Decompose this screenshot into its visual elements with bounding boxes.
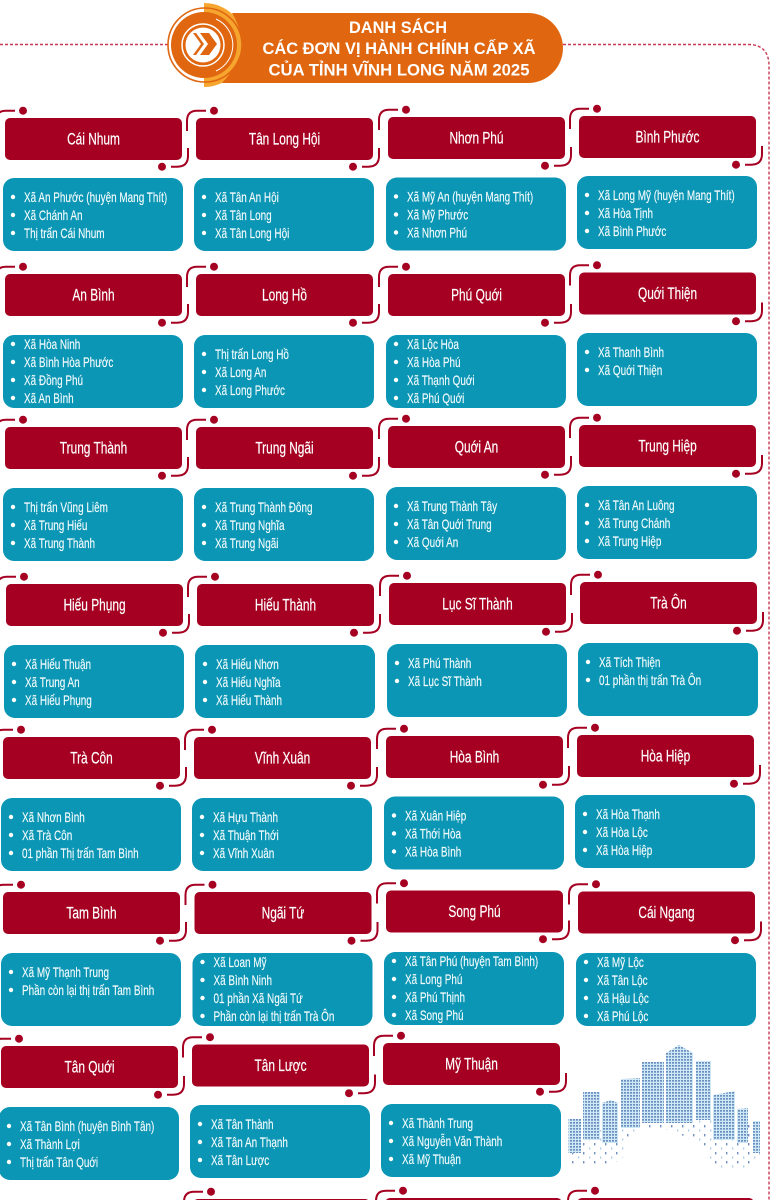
header: Cái Nhum [0, 107, 188, 171]
list: Trà Côn: Xã Trà Côn [22, 827, 72, 843]
header: Tân Lược [183, 1033, 375, 1097]
header: Hiếu Thành: Hiếu Thành [255, 597, 316, 615]
list: Tân Lược: Xã Tân An Thạnh [211, 1134, 288, 1150]
list: Vĩnh Xuân: Xã Thuận Thới [213, 827, 279, 843]
list: Tân Long Hội: Xã Tân Long Hội [215, 225, 289, 241]
panel: Cái Nhum [0, 107, 188, 251]
header: An Bình [0, 263, 188, 327]
panel: Quới Thiện [570, 261, 762, 406]
panel: Mỹ Thuận [374, 1032, 566, 1177]
list: Trà Ôn: Xã Tích Thiện [599, 654, 660, 670]
header: Bình Phước [570, 105, 762, 169]
list: Cái Ngang: Xã Tân Lộc [597, 972, 648, 988]
list: Trà Côn [1, 798, 181, 871]
list: Trung Hiệp [577, 486, 757, 559]
header stub: column 4 [568, 1187, 760, 1200]
list: An Bình: Xã Bình Hòa Phước [24, 354, 113, 370]
header: Nhơn Phú: Nhơn Phú [449, 130, 504, 148]
list: Tam Bình: Xã Mỹ Thạnh Trung [22, 964, 109, 980]
list: Hiếu Thành: Xã Hiếu Thành [216, 692, 282, 708]
header: Quới An [379, 415, 571, 479]
list: Song Phú: Xã Song Phú [405, 1007, 464, 1023]
panel: Ngãi Tứ [186, 881, 378, 1026]
header: Vĩnh Xuân [185, 726, 377, 790]
list: Quới An: Xã Tân Quới Trung [407, 516, 492, 532]
list: Trung Ngãi: Xã Trung Thành Đông [215, 499, 313, 515]
title text: DANH SÁCH [349, 18, 447, 37]
header: Trung Ngãi [187, 416, 379, 480]
list: Song Phú: Xã Phú Thịnh [405, 989, 465, 1005]
list: Cái Ngang: Xã Mỹ Lộc [597, 954, 644, 970]
header: Ngãi Tứ: Ngãi Tứ [262, 905, 305, 923]
list: Hiếu Thành [195, 645, 375, 718]
list: Trà Côn: Xã Nhơn Bình [22, 809, 85, 825]
header: Quới Thiện [570, 261, 762, 325]
title text [262, 18, 536, 80]
list: Cái Nhum: Xã Chánh An [24, 207, 83, 223]
list: An Bình: Xã Hòa Ninh [24, 336, 80, 352]
row 8 partial headers [184, 1187, 760, 1200]
list: Trung Hiệp: Xã Trung Hiệp [598, 533, 662, 549]
list: Bình Phước [577, 176, 757, 249]
list: Phú Quới: Xã Hòa Phú [407, 354, 461, 370]
list: Cái Nhum: Thị trấn Cái Nhum [24, 225, 105, 241]
list: Hòa Hiệp [575, 795, 755, 868]
header: Ngãi Tứ [186, 881, 378, 945]
panel: Tân Long Hội [187, 107, 379, 251]
list: Tân Lược: Xã Tân Thành [211, 1116, 274, 1132]
list: Long Hồ: Xã Long An [215, 364, 266, 380]
list: Quới An: Xã Quới An [407, 534, 458, 550]
panel: Hiếu Thành [188, 573, 380, 718]
panel: Quới An [379, 415, 571, 560]
panel: Vĩnh Xuân [185, 726, 377, 871]
header: Hiếu Phụng [0, 573, 189, 637]
list: Tân Quới: Xã Tân Bình (huyện Bình Tân) [20, 1118, 154, 1134]
list: Quới An [386, 487, 566, 560]
list: Mỹ Thuận: Xã Mỹ Thuận [402, 1151, 461, 1167]
header: Quới An: Quới An [455, 439, 498, 457]
header: Trà Ôn: Trà Ôn [650, 593, 687, 613]
header: Trà Côn [0, 726, 186, 790]
header: Trung Hiệp [570, 414, 762, 478]
list: Tân Quới: Xã Thành Lợi [20, 1136, 80, 1152]
header: Song Phú: Song Phú [448, 903, 501, 922]
panel: Long Hồ [187, 263, 379, 408]
list: Cái Nhum [3, 178, 183, 251]
header: Hiếu Phụng: Hiếu Phụng [63, 597, 126, 615]
list: Tân Long Hội [194, 178, 374, 251]
list: Hòa Hiệp: Xã Hòa Thạnh [596, 806, 660, 822]
title pill [222, 13, 563, 83]
list: Tân Quới [0, 1107, 179, 1180]
list: Trung Thành: Xã Trung Hiếu [24, 517, 87, 533]
panel: Tân Quới [0, 1035, 184, 1180]
header: Phú Quới: Phú Quới [451, 287, 502, 305]
list: Hiếu Thành: Xã Hiếu Nghĩa [216, 674, 281, 690]
panel: Trung Thành [0, 416, 188, 561]
header: Trung Hiệp: Trung Hiệp [638, 438, 697, 456]
list: Tân Lược [190, 1105, 370, 1178]
list: Cái Ngang: Xã Phú Lộc [597, 1008, 648, 1024]
list: Bình Phước: Xã Bình Phước [598, 223, 666, 239]
panel: Tân Lược [183, 1033, 375, 1178]
header stub: column 2 [184, 1188, 376, 1200]
list: Nhơn Phú: Xã Nhơn Phú [407, 225, 467, 241]
header: Trung Thành [0, 416, 188, 480]
list: Bình Phước: Xã Long Mỹ (huyện Mang Thít) [598, 187, 735, 203]
list: Ngãi Tứ: Xã Bình Ninh [214, 972, 272, 988]
header: Cái Ngang [569, 880, 761, 944]
list: Hiếu Phụng: Xã Hiếu Phụng [25, 692, 92, 708]
header stub: column 3 [376, 1187, 568, 1200]
list: Tân Lược: Xã Tân Lược [211, 1152, 269, 1168]
header: Trung Thành: Trung Thành [60, 440, 127, 458]
list: Lục Sĩ Thành [387, 644, 567, 717]
list: Phú Quới [386, 335, 566, 408]
header: Trà Ôn [571, 571, 763, 635]
list: Vĩnh Xuân [192, 798, 372, 871]
list: Trà Ôn [578, 643, 758, 716]
header: Tân Long Hội [187, 107, 379, 171]
panel: Phú Quới [379, 263, 571, 408]
list: Quới Thiện [577, 333, 757, 406]
list: Quới An: Xã Trung Thành Tây [407, 498, 498, 514]
list: Tam Bình: Phần còn lại thị trấn Tam Bình [22, 982, 154, 998]
header: Mỹ Thuận: Mỹ Thuận [445, 1056, 498, 1074]
header: Trà Côn: Trà Côn [70, 750, 113, 768]
header: Trung Ngãi: Trung Ngãi [255, 440, 314, 458]
list: Vĩnh Xuân: Xã Hựu Thành [213, 809, 278, 825]
list: Phú Quới: Xã Phú Quới [407, 390, 464, 406]
header: Tân Lược: Tân Lược [254, 1057, 307, 1076]
panel: Trà Côn [0, 726, 186, 871]
header: Phú Quới [379, 263, 571, 327]
panel: Cái Ngang [569, 880, 761, 1026]
list: An Bình [3, 335, 183, 408]
header: Cái Ngang: Cái Ngang [638, 904, 695, 923]
list: Hiếu Phụng [4, 645, 184, 718]
list: Trung Thành: Thị trấn Vũng Liêm [24, 499, 108, 515]
list: Song Phú: Xã Tân Phú (huyện Tam Bình) [405, 953, 538, 969]
list: Long Hồ: Thị trấn Long Hồ [215, 346, 289, 362]
header: Lục Sĩ Thành: Lục Sĩ Thành [442, 596, 513, 614]
list: Mỹ Thuận: Xã Nguyễn Văn Thành [402, 1132, 502, 1149]
list: Hòa Hiệp: Xã Hòa Hiệp [596, 842, 652, 858]
header: Hòa Hiệp [568, 724, 760, 788]
list: Trà Ôn: 01 phần thị trấn Trà Ôn [599, 671, 701, 688]
panel: Trà Ôn [571, 571, 763, 716]
header: Tân Quới [0, 1035, 184, 1099]
header: Quới Thiện: Quới Thiện [638, 285, 697, 304]
list: Tân Long Hội: Xã Tân An Hội [215, 189, 279, 205]
header: An Bình: An Bình [72, 287, 115, 305]
title text: CÁC ĐƠN VỊ HÀNH CHÍNH CẤP XÃ [262, 38, 536, 58]
header: Nhơn Phú [379, 106, 571, 170]
list: Trung Hiệp: Xã Tân An Luông [598, 497, 675, 513]
header: Tam Bình [0, 881, 186, 945]
list: Cái Ngang [576, 953, 756, 1026]
list: An Bình: Xã An Bình [24, 390, 74, 406]
list: Hiếu Phụng: Xã Hiếu Thuận [25, 656, 91, 672]
list: An Bình: Xã Đồng Phú [24, 372, 83, 388]
list: Ngãi Tứ [192, 953, 372, 1026]
list: Trung Thành: Xã Trung Thành [24, 535, 95, 551]
list: Ngãi Tứ: Xã Loan Mỹ [214, 954, 267, 970]
header: Hiếu Thành [188, 573, 380, 637]
list: Hiếu Phụng: Xã Trung An [25, 674, 80, 690]
panel: Trung Ngãi [187, 416, 379, 561]
list: Nhơn Phú [386, 178, 566, 250]
panel: Trung Hiệp [570, 414, 762, 559]
list: Cái Nhum: Xã An Phước (huyện Mang Thít) [24, 189, 167, 205]
header: Vĩnh Xuân: Vĩnh Xuân [255, 750, 310, 768]
header: Cái Nhum: Cái Nhum [67, 131, 120, 149]
header: Tân Quới: Tân Quới [64, 1059, 115, 1077]
list: Hòa Bình: Xã Thới Hòa [405, 826, 461, 842]
list: Cái Ngang: Xã Hậu Lộc [597, 990, 649, 1006]
list: Trung Ngãi: Xã Trung Nghĩa [215, 517, 285, 533]
header: Hòa Bình: Hòa Bình [450, 749, 499, 767]
list: Quới Thiện: Xã Thanh Bình [598, 344, 664, 360]
list: Phú Quới: Xã Thạnh Quới [407, 372, 475, 388]
list: Long Hồ: Xã Long Phước [215, 382, 285, 398]
list: Ngãi Tứ: Phần còn lại thị trấn Trà Ôn [214, 1007, 334, 1024]
list: Tam Bình [1, 953, 181, 1026]
panel: Nhơn Phú [379, 106, 571, 250]
list: Long Hồ [194, 335, 374, 408]
header: Long Hồ: Long Hồ [262, 287, 307, 305]
list: Nhơn Phú: Xã Mỹ An (huyện Mang Thít) [407, 189, 533, 205]
panel: Bình Phước [570, 105, 762, 249]
title text: CỦA TỈNH VĨNH LONG NĂM 2025 [268, 60, 530, 80]
panel: An Bình [0, 263, 188, 408]
icon: dotted city skyline [568, 1045, 760, 1168]
panel: Hòa Hiệp [568, 724, 760, 868]
title banner [168, 3, 563, 87]
panel: Hiếu Phụng [0, 573, 189, 718]
list: Tân Quới: Thị trấn Tân Quới [20, 1154, 98, 1170]
list: Trung Hiệp: Xã Trung Chánh [598, 515, 670, 531]
header: Tân Long Hội: Tân Long Hội [249, 131, 320, 149]
list: Song Phú: Xã Long Phú [405, 971, 462, 987]
header: Long Hồ [187, 263, 379, 327]
icon: chevron medallion [168, 3, 246, 87]
list: Trung Thành [3, 488, 183, 561]
header: Mỹ Thuận [374, 1032, 566, 1096]
list: Hòa Hiệp: Xã Hòa Lộc [596, 824, 648, 840]
list: Trung Ngãi: Xã Trung Ngãi [215, 535, 278, 551]
list: Lục Sĩ Thành: Xã Lục Sĩ Thành [408, 673, 482, 689]
list: Hòa Bình [384, 796, 564, 870]
header: Song Phú [377, 879, 569, 943]
list: Nhơn Phú: Xã Mỹ Phước [407, 207, 468, 223]
list: Quới Thiện: Xã Quới Thiện [598, 362, 662, 378]
header: Hòa Hiệp: Hòa Hiệp [641, 748, 690, 766]
list: Hiếu Thành: Xã Hiếu Nhơn [216, 656, 279, 672]
header: Hòa Bình [377, 725, 569, 789]
list: Ngãi Tứ: 01 phần Xã Ngãi Tứ [214, 990, 303, 1006]
panel: Tam Bình [0, 881, 186, 1026]
list: Tân Long Hội: Xã Tân Long [215, 207, 272, 223]
list: Mỹ Thuận: Xã Thành Trung [402, 1115, 473, 1131]
list: Trà Côn: 01 phần Thị trấn Tam Bình [22, 845, 139, 861]
list: Hòa Bình: Xã Hòa Bình [405, 844, 461, 860]
list: Trung Ngãi [194, 488, 374, 561]
header: Lục Sĩ Thành [380, 572, 572, 636]
list: Song Phú [384, 952, 564, 1025]
panel: Song Phú [377, 879, 569, 1025]
header: Tam Bình: Tam Bình [66, 905, 117, 923]
header: Bình Phước: Bình Phước [636, 129, 699, 147]
list: Phú Quới: Xã Lộc Hòa [407, 336, 459, 352]
list: Lục Sĩ Thành: Xã Phú Thành [408, 655, 471, 671]
list: Hòa Bình: Xã Xuân Hiệp [405, 808, 466, 824]
panel: Hòa Bình [377, 725, 569, 870]
list: Mỹ Thuận [381, 1104, 561, 1177]
panel: Lục Sĩ Thành [380, 572, 572, 717]
list: Vĩnh Xuân: Xã Vĩnh Xuân [213, 845, 274, 861]
list: Bình Phước: Xã Hòa Tịnh [598, 205, 653, 221]
